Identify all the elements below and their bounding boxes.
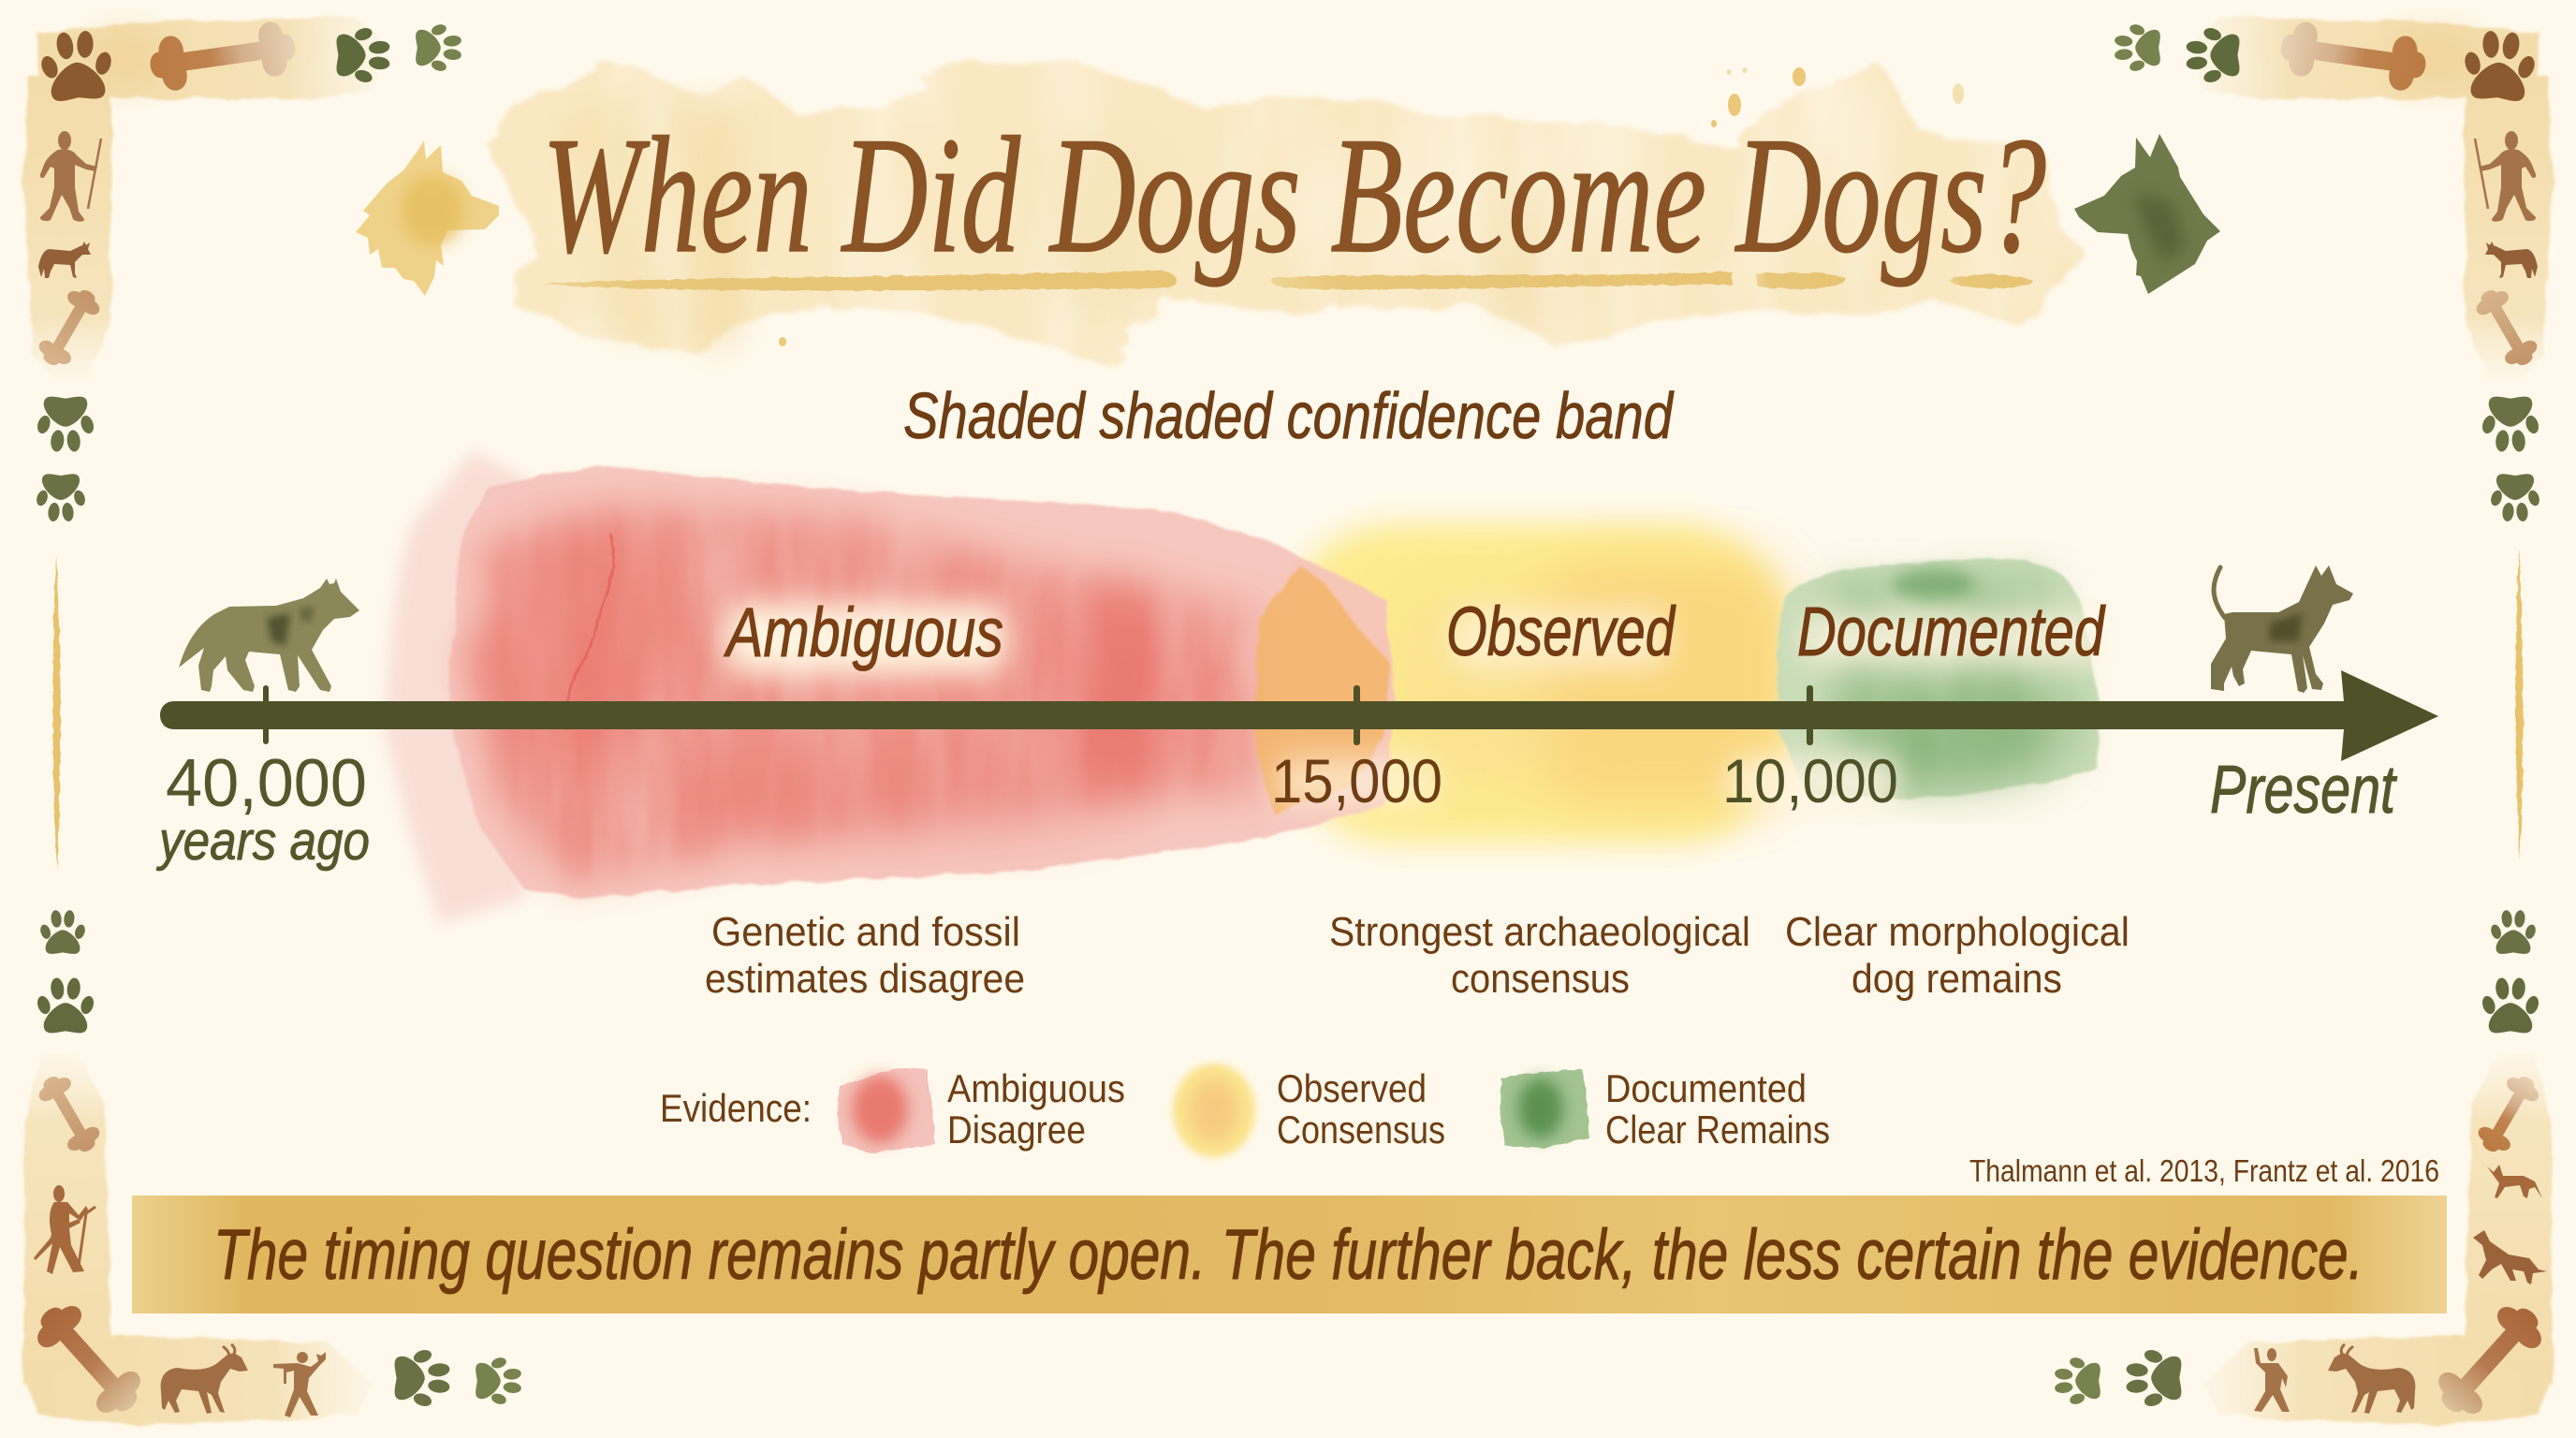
corner border: top right [2192, 17, 2553, 379]
icon: brown dog [2473, 1230, 2547, 1284]
icon: dog on timeline [2211, 565, 2353, 693]
label halos [725, 604, 2101, 805]
legend title: Evidence: [660, 1086, 812, 1130]
legend text: ambiguous: Disagree [947, 1108, 1086, 1152]
corner border: top left [23, 17, 384, 379]
icon: walking hunter [273, 1352, 326, 1417]
citation: Thalmann et al. 2013, Frantz et al. 2016 [1969, 1153, 2439, 1188]
icon: hunter with spear [40, 131, 101, 222]
description: ambiguous: Genetic and fossil [711, 909, 1020, 955]
corner border: bottom left [23, 1054, 373, 1425]
icon: bone [2277, 19, 2429, 94]
subtitle: Shaded shaded confidence band [903, 379, 1675, 452]
legend text: documented: Clear Remains [1605, 1108, 1830, 1152]
legend text: observed: Observed [1277, 1066, 1427, 1110]
icon: goat [161, 1344, 248, 1414]
legend text: documented [1605, 1066, 1830, 1152]
axis label: 40,000 years ago [155, 746, 370, 872]
icon: fox [2487, 1165, 2542, 1198]
icon: small bone [34, 283, 105, 373]
takeaway banner [132, 1196, 2447, 1313]
icon: brown paw [2460, 28, 2539, 102]
icon: large bone [26, 1294, 152, 1425]
band label: Ambiguous: Ambiguous [724, 594, 1003, 671]
decorative side strokes [52, 548, 2524, 871]
icon: golden wolf head [356, 140, 499, 296]
description: documented: Clear morphological [1785, 909, 2130, 955]
tick: 15,000 [1354, 685, 1360, 745]
icon: small bone [2471, 283, 2542, 373]
legend swatch: green [1500, 1069, 1589, 1148]
icon: olive dog head [2074, 134, 2220, 294]
paint splatters [779, 67, 1964, 346]
description: observed: Strongest archaeological [1329, 909, 1750, 955]
description: ambiguous [705, 909, 1025, 1002]
axis label: 40,000 years ago: 40,000 [166, 746, 367, 821]
icon: wolf on timeline [179, 579, 359, 692]
description: documented [1785, 909, 2130, 1002]
description: documented: dog remains [1852, 956, 2062, 1002]
axis label: Present: Present [2210, 753, 2397, 828]
timeline arrow [160, 670, 2438, 761]
confidence band: orange overlap [1254, 565, 1388, 814]
description: observed: consensus [1451, 956, 1630, 1002]
tick: 10,000 [1807, 685, 1813, 745]
axis label: 15,000: 15,000 [1271, 746, 1442, 815]
confidence band: green documented [1777, 559, 2101, 800]
icon: small ox [2485, 242, 2538, 278]
legend text: ambiguous: Ambiguous [947, 1066, 1125, 1110]
legend text: observed: Consensus [1277, 1108, 1445, 1152]
tick: 40,000 [263, 685, 269, 744]
legend swatch: yellow [1173, 1064, 1255, 1157]
icon: walking hunter [2254, 1348, 2290, 1412]
icon: small ox [38, 242, 91, 278]
description: ambiguous: estimates disagree [705, 956, 1025, 1002]
title watercolor wash [487, 59, 2089, 362]
icon: small bone [2473, 1069, 2544, 1159]
icon: large bone [2427, 1295, 2553, 1426]
legend [660, 1064, 1830, 1157]
band label: Observed: Observed [1446, 593, 1676, 670]
icon: hunter with spear [2475, 131, 2536, 222]
axis label: 40,000 years ago: years ago [155, 811, 370, 872]
title underline brush strokes [542, 271, 2033, 290]
confidence band: red ambiguous [385, 451, 1395, 923]
icon: brown paw [37, 28, 116, 102]
confidence band: yellow observed [1282, 524, 1788, 843]
axis label: 10,000: 10,000 [1722, 746, 1898, 815]
icon: bone [147, 19, 299, 94]
legend text: documented: Documented [1605, 1066, 1807, 1110]
paw prints: left side [35, 22, 521, 1408]
legend swatch: red [837, 1067, 935, 1153]
legend text: observed [1277, 1066, 1445, 1152]
description: observed [1329, 909, 1750, 1002]
icon: hunter with axe [34, 1185, 95, 1274]
band label: Documented: Documented [1797, 593, 2106, 670]
icon: small bone [34, 1069, 105, 1159]
paw prints: right side [2055, 22, 2541, 1408]
legend text: ambiguous [947, 1066, 1125, 1152]
corner border: bottom right [2203, 1054, 2553, 1426]
icon: goat [2328, 1344, 2415, 1414]
